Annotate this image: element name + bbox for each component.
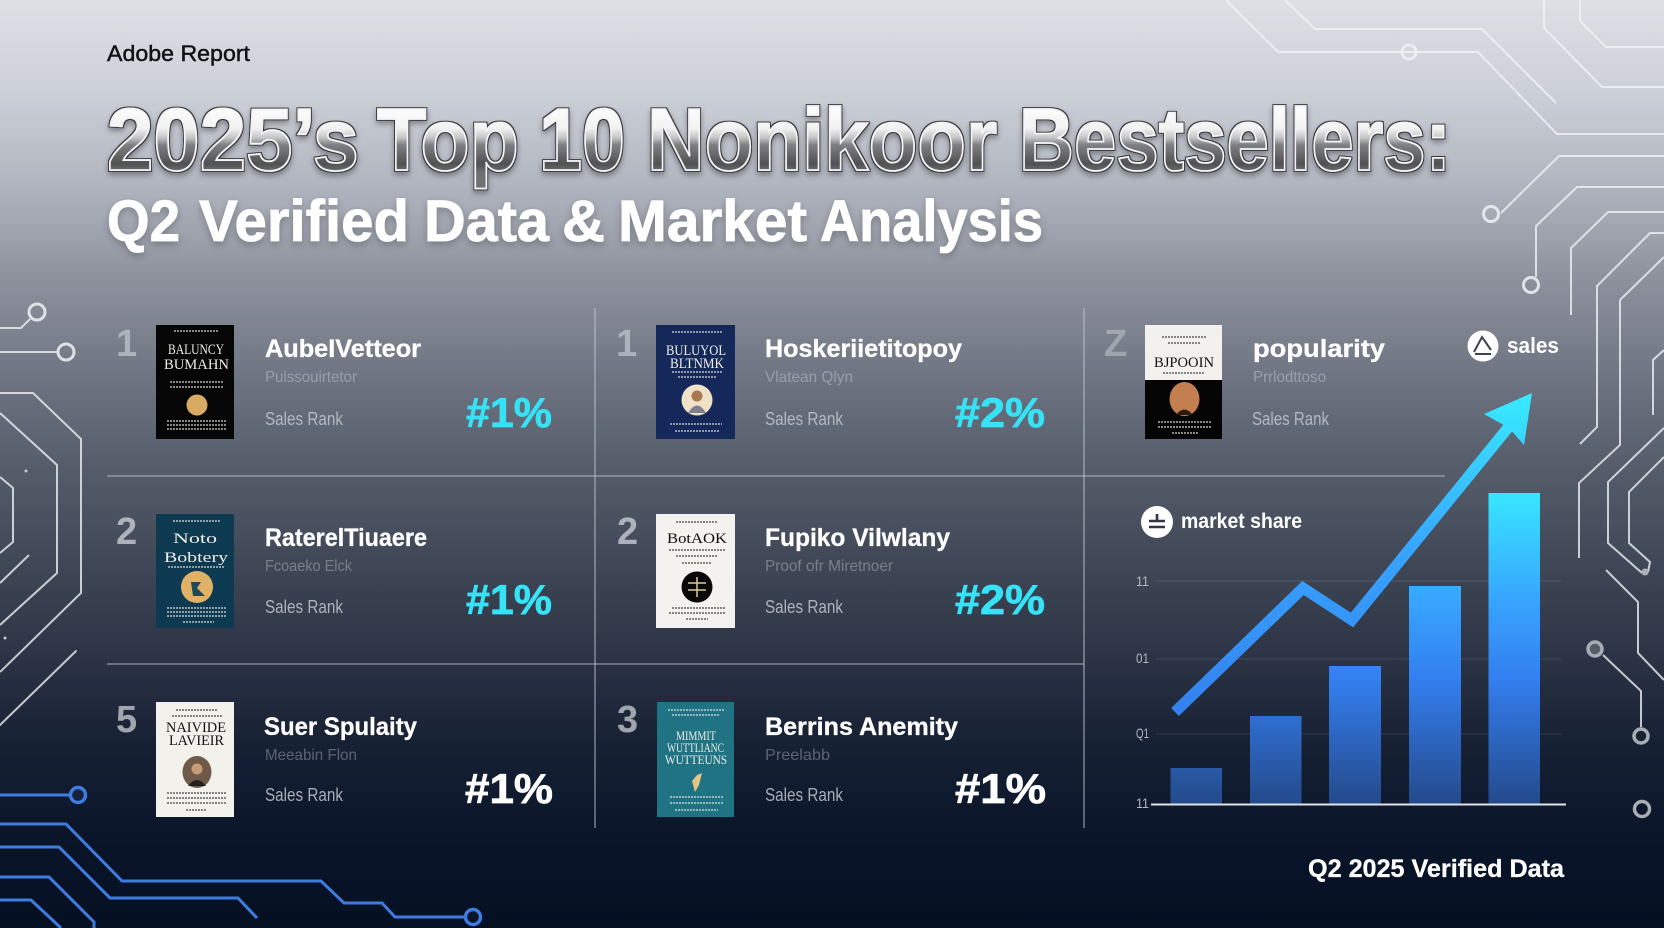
subtitle: Data (424, 189, 550, 254)
subtitle: & (562, 189, 605, 254)
book cover: teal with emblem: WUTTEUNS (665, 752, 727, 767)
book title: popularity (1253, 335, 1385, 363)
book cover: navy: BULUYOL (666, 343, 726, 359)
author: Vlatean Qlyn (765, 369, 853, 386)
book cover: white (656, 514, 735, 628)
book title: Fupiko Vilwlany (765, 524, 950, 552)
axis labels: 01 (1136, 650, 1149, 666)
book cover: black (156, 325, 234, 439)
arrow: growth trend (1175, 393, 1532, 712)
header label: Adobe Report: Adobe Report (107, 41, 251, 66)
title: Top (377, 90, 519, 189)
rank: 2 (617, 511, 638, 553)
sales rank value: #1% (465, 765, 553, 812)
book title: Hoskeriietitopoy (765, 335, 962, 363)
panel: book row 3 column 1 (116, 699, 553, 817)
sales rank label: Sales Rank (765, 597, 844, 617)
author: Meeabin Flon (265, 747, 357, 764)
title (107, 90, 1451, 189)
rank: 5 (116, 699, 137, 741)
circuit traces: bottom left blue (0, 788, 480, 928)
legend: market share (1141, 506, 1302, 538)
title: 10 (539, 90, 625, 189)
grid lines (1156, 581, 1561, 734)
rank: 1 (116, 323, 137, 365)
subtitle: Verified (199, 189, 409, 254)
sales rank label: Sales Rank (765, 785, 844, 805)
circuit traces: left side (0, 304, 81, 725)
panel: book row 2 column 1 (116, 511, 552, 628)
book cover: teal with emblem: MIMMIT (676, 728, 716, 743)
sales rank value: #1% (466, 389, 552, 436)
author: Preelabb (765, 747, 830, 764)
book cover: teal with emblem: WUTTLIANC (667, 740, 724, 755)
bars (1170, 493, 1540, 804)
subtitle (107, 189, 1043, 254)
book cover: teal: Noto (173, 531, 217, 547)
book cover: white and black (1145, 325, 1222, 439)
sales rank value: #2% (955, 576, 1045, 623)
author: Fcoaeko Elck (265, 558, 353, 575)
axis labels: 11 (1136, 795, 1149, 811)
axis labels: Q1 (1136, 725, 1149, 741)
book cover: navy: BLTNMK (670, 356, 724, 372)
book title: Berrins Anemity (765, 713, 958, 741)
rank: 2 (116, 511, 137, 553)
title: Nonikoor (647, 90, 997, 189)
panel: book row 1 column 1 (116, 323, 552, 439)
sales rank label: Sales Rank (265, 785, 344, 805)
subtitle: Analysis (820, 189, 1043, 254)
subtitle: Market (618, 189, 807, 254)
chart: bars and growth arrow (1136, 393, 1566, 811)
book cover: white with portrait: NAIVIDE (166, 720, 226, 736)
axis labels (1136, 573, 1149, 811)
circuit traces: top right (1226, 0, 1664, 315)
book cover: teal (156, 514, 234, 628)
rank: 1 (616, 323, 637, 365)
book cover: white with portrait: LAVIEIR (169, 733, 224, 749)
author: Pulssouirtetor (265, 369, 358, 386)
icon: sales (1468, 330, 1498, 362)
book cover: teal: Bobtery (164, 550, 229, 566)
sales rank value: #1% (955, 765, 1046, 812)
book title: Suer Spulaity (264, 713, 417, 741)
footer note: Q2 2025 Verified Data (1308, 855, 1565, 883)
circuit traces: right side (1579, 300, 1664, 816)
title: Bestsellers: (1019, 90, 1451, 189)
book cover: white with portrait (156, 702, 234, 817)
book cover: white and black: BJPOOIN (1154, 355, 1214, 371)
sales rank value: #1% (466, 576, 552, 623)
book cover: navy (656, 325, 735, 439)
axis labels: 11 (1136, 573, 1149, 589)
panel: book row 3 column 2 (617, 699, 1046, 817)
book cover: white: BotAOK (667, 531, 727, 547)
panel: book row 2 column 2 (617, 511, 1045, 628)
sales label: sales (1507, 333, 1559, 358)
sales rank label: Sales Rank (265, 409, 344, 429)
sales rank label: Sales Rank (265, 597, 344, 617)
axis line (1151, 804, 1566, 806)
author: Prrlodttoso (1253, 369, 1326, 386)
legend: sales (1468, 330, 1559, 362)
rank: Z (1104, 323, 1127, 365)
sales rank label: Sales Rank (1252, 409, 1330, 429)
author: Proof ofr Miretnoer (765, 558, 894, 575)
book cover: black: BALUNCY (168, 342, 224, 358)
book cover: black: BUMAHN (164, 357, 229, 373)
book title: AubeIVetteor (265, 335, 421, 363)
book cover: teal with emblem (657, 702, 734, 817)
rank: 3 (617, 699, 638, 741)
sales rank value: #2% (955, 389, 1045, 436)
icon: market share (1141, 506, 1173, 538)
panel: book row 1 column 2 (616, 323, 1045, 439)
grid dividers (107, 308, 1445, 828)
sales rank label: Sales Rank (765, 409, 844, 429)
market share label: market share (1181, 510, 1302, 533)
subtitle: Q2 (107, 189, 180, 254)
book title: RaterelTiuaere (265, 524, 427, 552)
title: 2025’s (107, 90, 359, 189)
panel: book row 1 column 3 (1104, 323, 1385, 439)
